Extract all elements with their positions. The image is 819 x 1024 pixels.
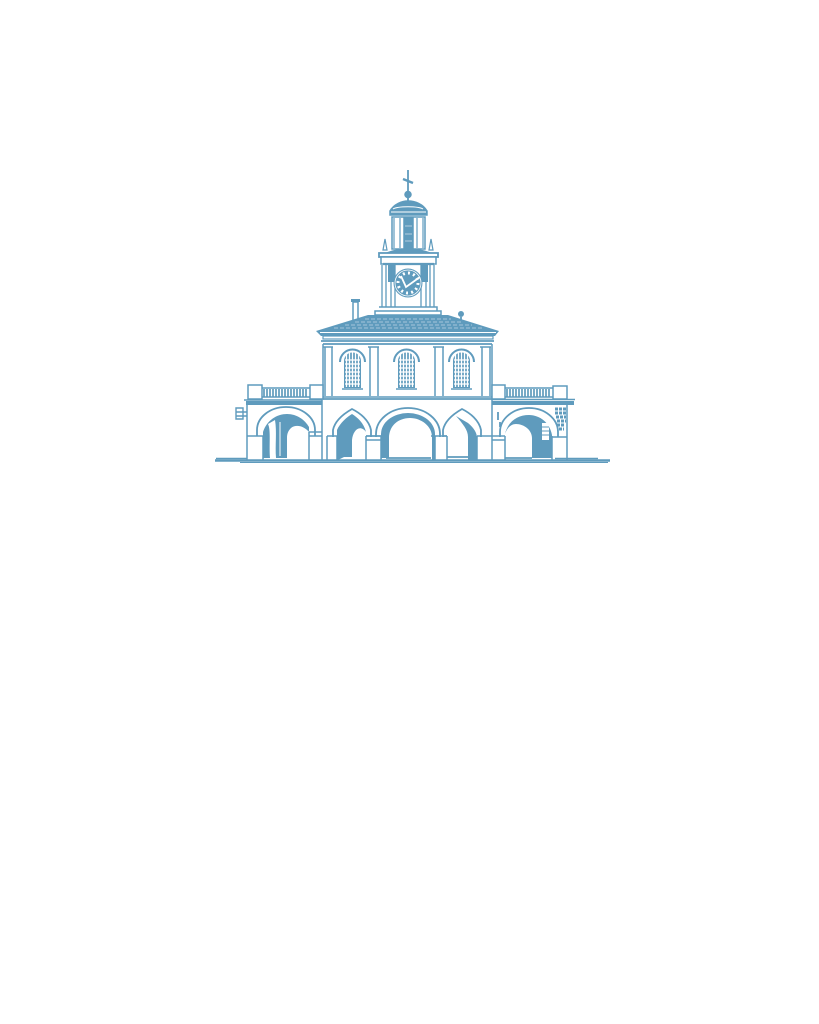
roof ornament xyxy=(458,312,464,322)
left balustrade xyxy=(248,385,323,399)
hipped roof xyxy=(316,315,499,344)
ivy on right wing xyxy=(498,409,567,429)
icon: clock xyxy=(394,268,422,298)
arch: far right xyxy=(492,408,567,460)
icon: weathervane xyxy=(403,170,413,201)
arch: left pointed xyxy=(327,409,381,460)
window: right xyxy=(449,350,474,389)
chimney xyxy=(351,299,360,321)
arch: centre xyxy=(366,408,447,460)
hanging sign on left wing xyxy=(236,408,247,419)
window: centre xyxy=(394,350,419,389)
ground floor walls xyxy=(247,399,567,460)
right balustrade xyxy=(492,385,567,399)
ground line xyxy=(215,458,610,462)
wing cornices xyxy=(244,400,575,405)
arch: right pointed xyxy=(443,409,492,460)
upper storey wall xyxy=(323,344,492,399)
window: left xyxy=(340,350,365,389)
clock tower xyxy=(375,253,441,315)
cupola dome and drum xyxy=(383,201,433,253)
arch: far left xyxy=(247,407,322,460)
